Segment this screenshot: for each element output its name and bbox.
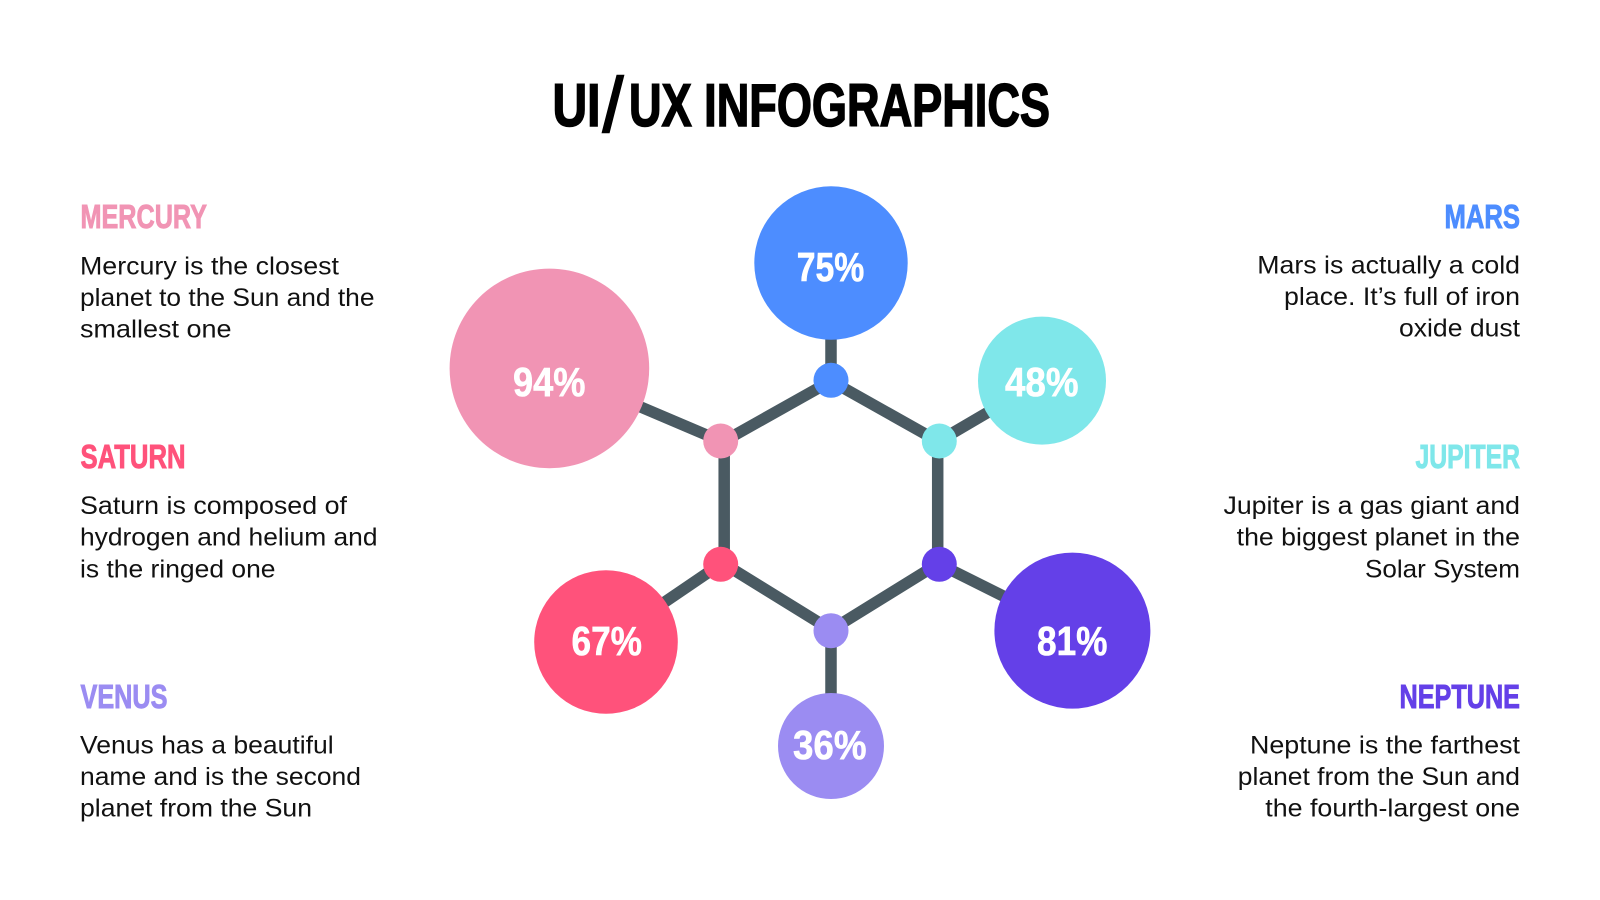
text: mercury description xyxy=(80,252,374,344)
text: mercury description: planet to the Sun and the xyxy=(80,284,374,312)
text: mars description: Mars is actually a cold xyxy=(1257,251,1520,279)
bubble: mercury 94% xyxy=(450,269,649,468)
text: venus description: Venus has a beautiful xyxy=(80,731,334,759)
text: neptune description: planet from the Sun and xyxy=(1238,763,1520,791)
title: / xyxy=(603,63,624,148)
text: neptune description: the fourth-largest one xyxy=(1265,795,1520,823)
text: mars description xyxy=(1257,251,1520,343)
text: mars description: oxide dust xyxy=(1399,315,1520,343)
text: neptune description: Neptune is the farthest xyxy=(1250,731,1520,759)
bubble: saturn 67%: 67% xyxy=(572,618,642,664)
text: jupiter description: Jupiter is a gas giant and xyxy=(1224,492,1520,520)
title: UX INFOGRAPHICS xyxy=(629,72,1050,139)
text: jupiter description xyxy=(1224,492,1520,583)
text: jupiter description: Solar System xyxy=(1365,555,1520,583)
text: venus description: planet from the Sun xyxy=(80,795,312,823)
text: saturn description xyxy=(80,492,378,583)
chart: hexagon diagram xyxy=(450,186,1150,799)
text: saturn description: Saturn is composed of xyxy=(80,492,347,520)
text: jupiter description: the biggest planet in the xyxy=(1237,524,1520,552)
bubble: venus 36% xyxy=(778,693,884,799)
bubble: jupiter 48%: 48% xyxy=(1005,359,1078,405)
heading: neptune: NEPTUNE xyxy=(1400,678,1520,715)
panel: saturn xyxy=(80,438,378,583)
heading: venus: VENUS xyxy=(80,678,168,715)
connecting lines xyxy=(549,263,1072,746)
bubble: jupiter 48% xyxy=(978,317,1106,445)
panel: jupiter xyxy=(1224,438,1520,583)
panel: mercury xyxy=(80,198,374,344)
text: saturn description: hydrogen and helium and xyxy=(80,524,378,552)
title: UI xyxy=(552,72,600,139)
panel: neptune xyxy=(1238,678,1520,823)
text: mercury description: smallest one xyxy=(80,316,232,344)
text: mars description: place. It’s full of iron xyxy=(1284,283,1520,311)
bubble: mars 75% xyxy=(754,186,908,340)
bubble: venus 36%: 36% xyxy=(793,722,866,768)
panel: mars xyxy=(1257,198,1520,343)
text: mercury description: Mercury is the closest xyxy=(80,252,339,280)
bubble: neptune 81%: 81% xyxy=(1037,618,1108,664)
text: neptune description xyxy=(1238,731,1520,823)
text: saturn description: is the ringed one xyxy=(80,555,276,583)
heading: jupiter: JUPITER xyxy=(1416,438,1520,475)
text: venus description xyxy=(80,731,361,823)
bubble: mars 75%: 75% xyxy=(797,244,864,290)
bubble: mercury 94%: 94% xyxy=(513,359,586,405)
bubble: neptune 81% xyxy=(994,553,1150,709)
heading: mercury: MERCURY xyxy=(80,198,207,235)
bubble: saturn 67% xyxy=(534,570,678,714)
nodes xyxy=(703,363,957,648)
title xyxy=(552,63,1050,148)
heading: mars: MARS xyxy=(1444,198,1520,235)
panel: venus xyxy=(80,678,361,823)
heading: saturn: SATURN xyxy=(80,438,186,475)
text: venus description: name and is the second xyxy=(80,763,361,791)
